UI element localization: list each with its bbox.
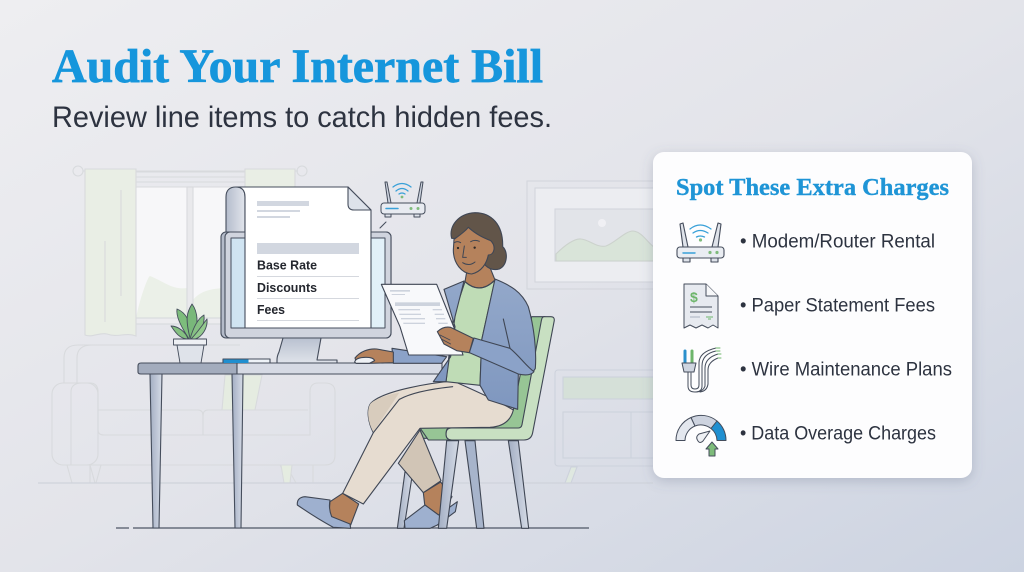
paper sheet — [236, 187, 371, 328]
plant — [171, 304, 207, 363]
bill document on screen — [226, 187, 371, 328]
shirt — [446, 280, 495, 385]
modem item label: • Modem/Router Rental — [740, 232, 935, 252]
chair legs — [465, 441, 484, 528]
icon: paper bill — [684, 284, 718, 328]
facial features — [454, 240, 479, 265]
desk — [138, 359, 442, 528]
wire item label: • Wire Maintenance Plans — [740, 360, 952, 380]
neck — [465, 263, 495, 288]
desk top — [138, 363, 237, 374]
hair back and bun — [451, 213, 506, 270]
desk leg right — [232, 374, 243, 528]
subtitle: Review line items to catch hidden fees. — [52, 101, 552, 134]
front shoe — [297, 497, 351, 528]
bill rows: Fees — [257, 302, 285, 317]
reaching arm sleeve — [392, 348, 447, 363]
back foot — [423, 482, 452, 516]
cardigan right panel — [480, 279, 536, 409]
back shoe — [404, 502, 457, 528]
holding hand — [437, 327, 473, 353]
cardigan crease — [503, 319, 510, 348]
paper curl — [226, 187, 245, 232]
panel heading: Spot These Extra Charges — [676, 174, 949, 201]
chair rear leg — [397, 472, 412, 528]
chair back inner — [420, 317, 545, 438]
document lines — [390, 290, 448, 324]
icon: data gauge — [676, 415, 726, 456]
reaching hand — [355, 349, 393, 363]
monitor screen — [231, 238, 385, 328]
desk leg left — [150, 374, 162, 528]
back leg — [398, 430, 441, 493]
book on desk — [223, 359, 270, 363]
icon: small router callout — [380, 182, 425, 228]
icon: paper bill: $ — [690, 289, 698, 305]
front leg — [343, 381, 513, 504]
knee shading — [368, 393, 399, 432]
person — [297, 213, 536, 528]
held document — [381, 284, 463, 355]
floor lines — [38, 483, 653, 528]
bill rows: Base Rate — [257, 258, 317, 272]
bill rows — [257, 258, 317, 317]
room background: sideboard — [555, 370, 663, 483]
room background: window and curtains — [73, 166, 307, 336]
front foot — [328, 493, 359, 525]
monitor stand — [277, 338, 337, 363]
placeholder bars — [257, 201, 359, 254]
shirt collar — [465, 280, 495, 288]
mouse — [355, 357, 375, 363]
paper fold — [348, 187, 371, 210]
monitor frame — [221, 232, 391, 338]
paper item label: • Paper Statement Fees — [740, 296, 935, 316]
room background: sofa — [52, 345, 335, 483]
icon: plug and wires — [682, 348, 721, 392]
chair leg front — [438, 441, 459, 528]
row dividers — [257, 276, 359, 320]
panel: extra charges — [653, 152, 972, 478]
room background: wall picture — [527, 181, 662, 289]
monitor — [221, 232, 391, 363]
icon: router — [677, 223, 724, 262]
title: Audit Your Internet Bill — [52, 40, 543, 93]
bill rows: Discounts — [257, 280, 317, 295]
cardigan left panel — [433, 281, 464, 382]
forearm sleeve — [469, 338, 534, 375]
chair back and seat — [446, 317, 554, 440]
chair — [397, 317, 554, 528]
data item label: • Data Overage Charges — [740, 424, 936, 444]
panel card — [653, 152, 972, 478]
face — [453, 227, 494, 274]
